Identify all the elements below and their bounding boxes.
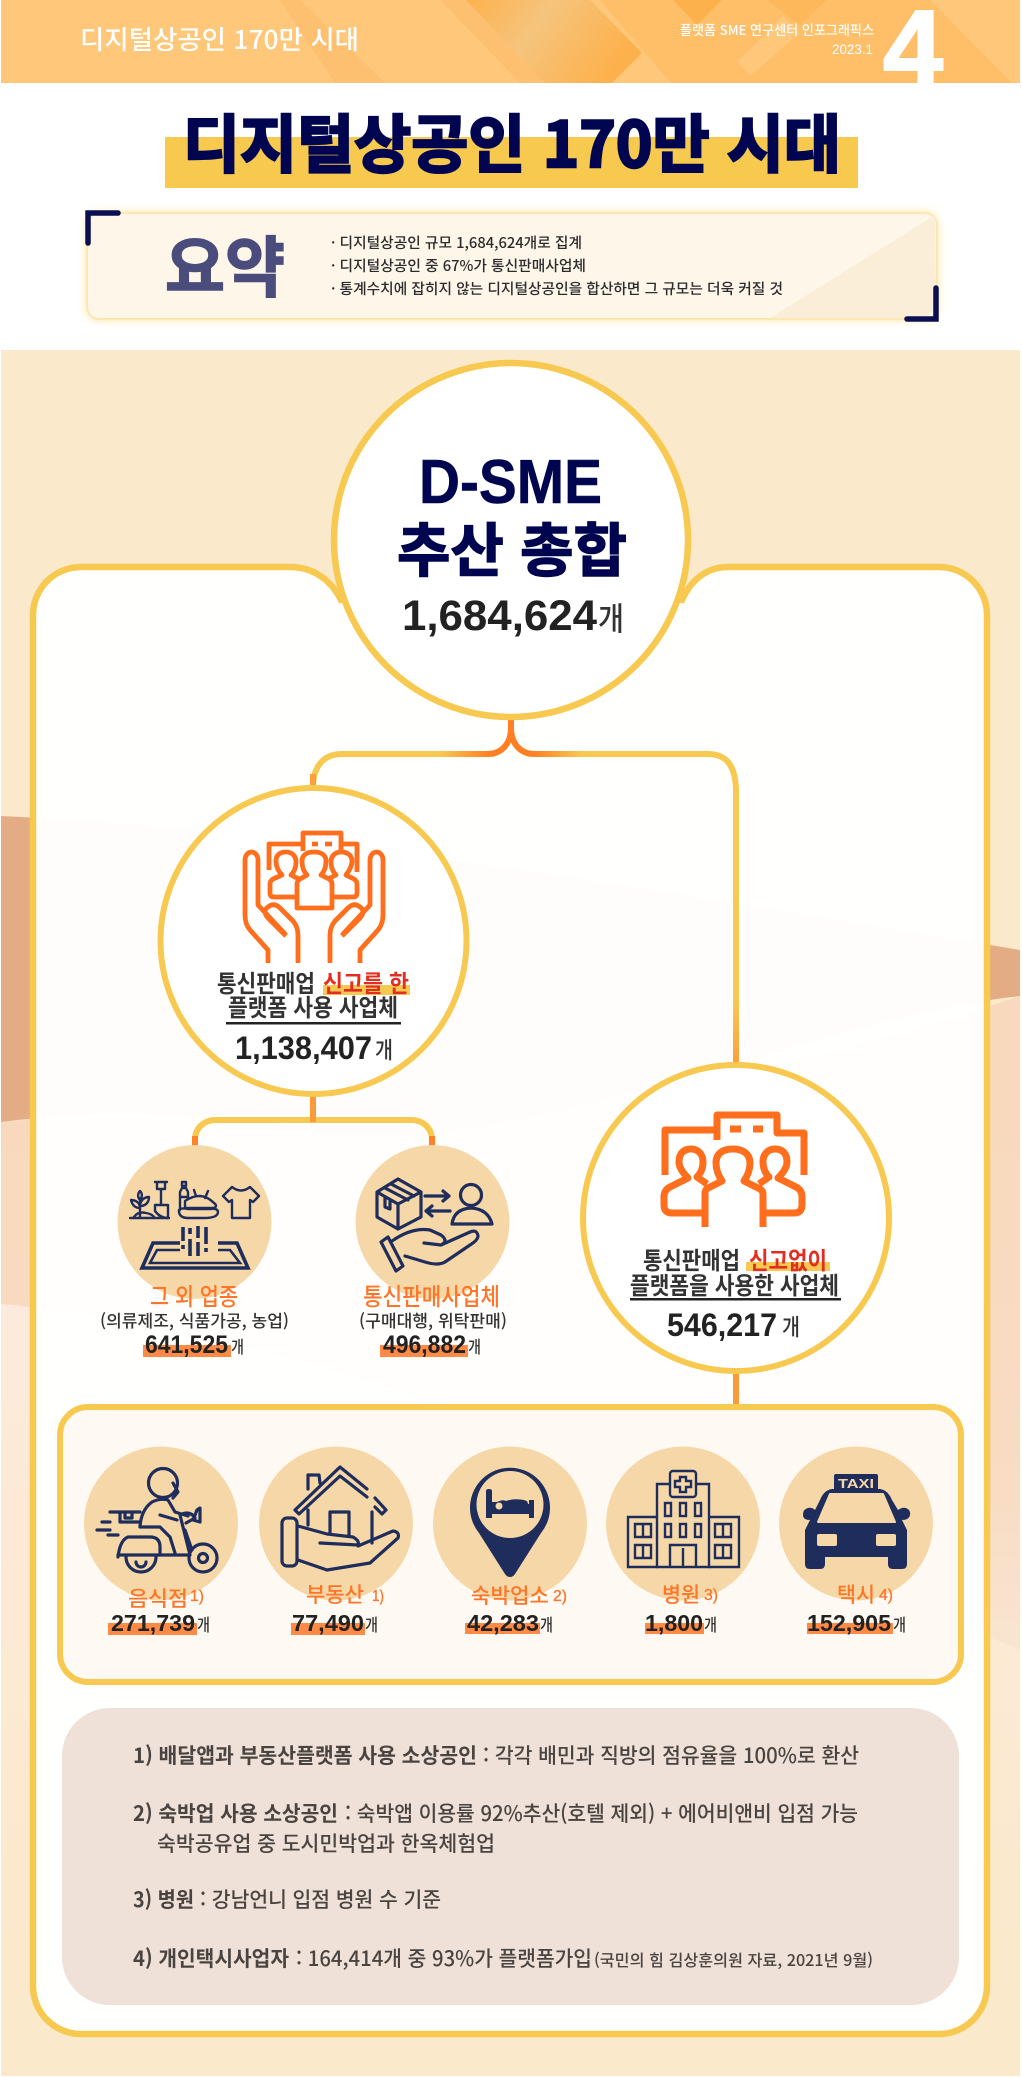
label: 부동산: [306, 1579, 364, 1609]
value: 271,739: [111, 1610, 195, 1636]
label: 3): [704, 1587, 718, 1604]
footnote 3: 3) 병원: [133, 1884, 194, 1914]
total value: 개: [598, 594, 624, 640]
icon: people and building: [664, 1115, 804, 1227]
item: lodging: [433, 1446, 587, 1636]
summary text: · 통계수치에 잡히지 않는 디지털상공인을 합산하면 그 규모는 더욱 커질 것: [331, 278, 783, 299]
circle: registered platforms: [160, 788, 466, 1094]
value: 496,882: [383, 1331, 466, 1359]
label: [630, 1241, 841, 1301]
circle: total: [334, 363, 688, 717]
header series label: 플랫폼 SME 연구센터 인포그래픽스: [680, 19, 874, 39]
footnote 4: : 164,414개 중 93%가 플랫폼가입: [296, 1943, 592, 1973]
value: 개: [893, 1611, 906, 1636]
summary text: [331, 232, 783, 299]
header banner: [1, 0, 1020, 83]
total subheading: 추산 총합: [397, 504, 627, 588]
value: 개: [704, 1611, 717, 1636]
value: 개: [365, 1611, 378, 1636]
icon: farm food clothing: [130, 1182, 259, 1218]
value: 42,283: [467, 1610, 539, 1636]
footnote 4: [133, 1943, 873, 1973]
value: 개: [782, 1308, 800, 1342]
footnote 2: 2) 숙박업 사용 소상공인: [133, 1798, 338, 1828]
icon: hospital: [628, 1471, 739, 1567]
value: 개: [540, 1611, 553, 1636]
summary heading: 요약: [165, 215, 285, 311]
label: 병원: [662, 1579, 700, 1609]
label: 그 외 업종: [150, 1277, 238, 1312]
main title: 디지털상공인 170만 시대: [183, 95, 841, 186]
panel: summary: [87, 213, 937, 319]
panel: footnotes: [62, 1708, 959, 2005]
footnote 1: : 각각 배민과 직방의 점유율을 100%로 환산: [483, 1740, 859, 1770]
footnote 1: [133, 1740, 859, 1770]
label: 숙박업소: [471, 1580, 549, 1610]
item: restaurants: [84, 1446, 238, 1636]
icon: taxi: [803, 1474, 910, 1569]
label: 4): [879, 1587, 893, 1604]
label: [662, 1579, 718, 1609]
value: 개: [468, 1333, 481, 1358]
footnote 2: [133, 1798, 858, 1858]
item: real estate: [259, 1446, 413, 1636]
summary text: · 디지털상공인 규모 1,684,624개로 집계: [331, 232, 582, 253]
footnote 2: 숙박공유업 중 도시민박업과 한옥체험업: [157, 1828, 495, 1858]
value: 546,217: [667, 1307, 777, 1343]
value: 152,905: [807, 1610, 891, 1636]
total value: 1,684,624: [402, 592, 597, 640]
panel: platform categories: [60, 1407, 961, 1682]
value: 개: [231, 1333, 244, 1358]
value: 1,138,407: [235, 1030, 372, 1066]
icon: delivery scooter: [97, 1468, 217, 1572]
icon: taxi: TAXI: [838, 1476, 874, 1491]
item: hospitals: [606, 1446, 760, 1636]
icon: location pin with bed: [470, 1468, 550, 1577]
label: [837, 1579, 893, 1609]
footnote 4: (국민의 힘 김상훈의원 자료, 2021년 9월): [594, 1947, 873, 1971]
item: taxi: [779, 1446, 933, 1636]
value: 개: [375, 1031, 393, 1065]
summary text: · 디지털상공인 중 67%가 통신판매사업체: [331, 255, 586, 276]
footnote 2: : 숙박앱 이용률 92%추산(호텔 제외) + 에어비앤비 입점 가능: [345, 1798, 858, 1828]
value: 1,800: [645, 1610, 703, 1636]
label: 1): [372, 1588, 384, 1605]
sublabel: (구매대행, 위탁판매): [359, 1307, 507, 1332]
total heading: D-SME: [419, 448, 602, 517]
icon: hands holding people: [245, 833, 383, 963]
label: 통신판매업: [643, 1241, 740, 1276]
label: 택시: [837, 1579, 875, 1609]
label: 플랫폼 사용 사업체: [228, 988, 398, 1023]
value: 개: [197, 1611, 210, 1636]
label: 통신판매업: [217, 964, 315, 999]
icon: box person hand: [377, 1179, 492, 1271]
label: 신고없이: [749, 1241, 827, 1276]
sublabel: (의류제조, 식품가공, 농업): [100, 1307, 289, 1332]
connector: top split: [313, 718, 736, 1064]
icon: house in hand: [282, 1467, 398, 1570]
label: 신고를 한: [323, 964, 409, 999]
header title: 디지털상공인 170만 시대: [80, 20, 359, 57]
footnote 3: : 강남언니 입점 병원 수 기준: [200, 1884, 441, 1914]
connector: left branch: [195, 1095, 432, 1147]
label: 1): [190, 1588, 204, 1605]
footnote 1: 1) 배달앱과 부동산플랫폼 사용 소상공인: [133, 1740, 477, 1770]
label: 2): [553, 1588, 567, 1605]
value: 77,490: [292, 1610, 364, 1636]
circle: unregistered platforms: [583, 1065, 889, 1371]
header date: 2023.1: [832, 41, 873, 57]
label: 통신판매사업체: [363, 1277, 500, 1312]
label: 플랫폼을 사용한 사업체: [630, 1266, 839, 1301]
connector: right to bottom panel: [733, 1372, 739, 1406]
label: [217, 964, 410, 1024]
label: 음식점: [128, 1583, 188, 1613]
panel: main outline: [33, 567, 987, 2034]
item: other industries: [100, 1145, 289, 1359]
footnote 4: 4) 개인택시사업자: [133, 1943, 289, 1973]
value: 641,525: [145, 1331, 228, 1359]
item: mail order businesses: [356, 1145, 510, 1359]
